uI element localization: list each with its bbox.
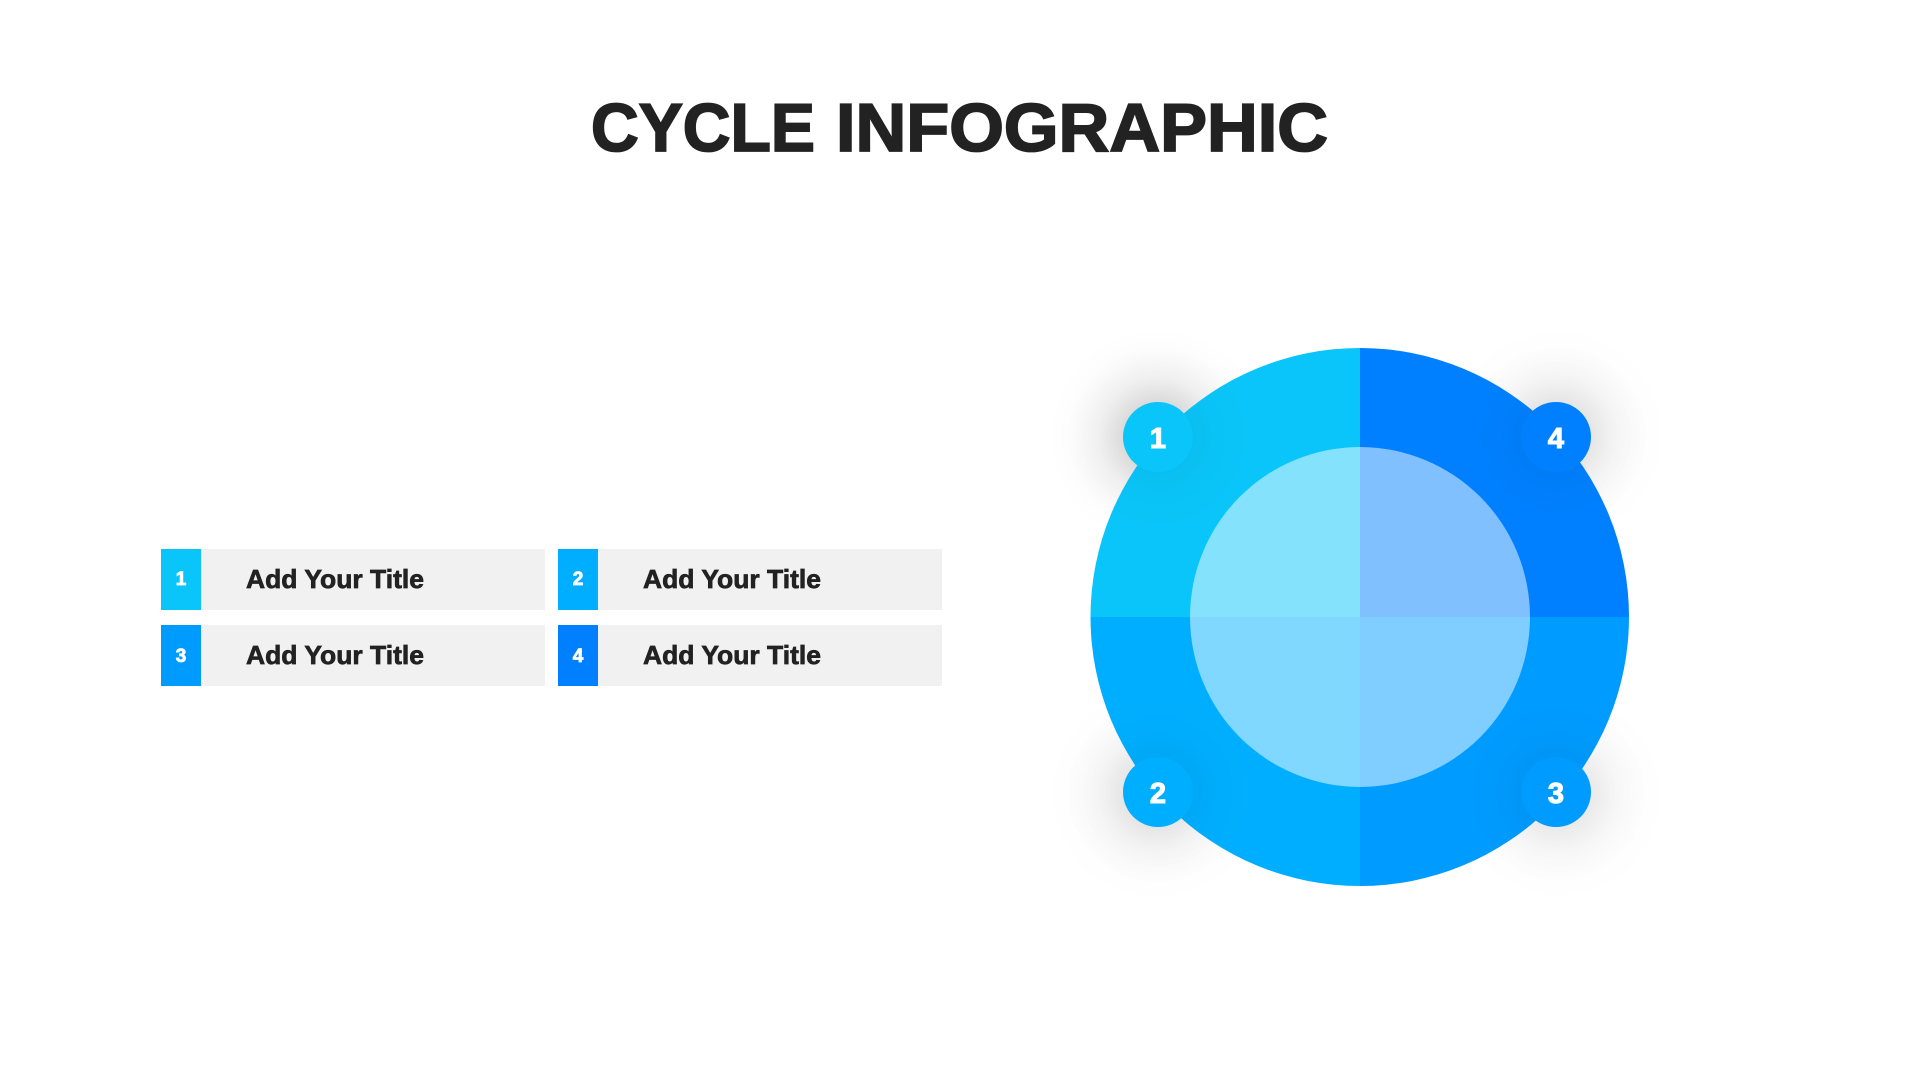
legend item 4: 4 bbox=[573, 646, 584, 667]
title: INFOGRAPHIC bbox=[836, 90, 1328, 166]
legend item 3: Add Your Title bbox=[246, 640, 424, 670]
badge 1: 1 bbox=[1150, 423, 1166, 455]
ring segment 4 bbox=[1360, 348, 1629, 617]
badge 1 bbox=[1123, 402, 1193, 472]
inner circle bbox=[1190, 447, 1530, 787]
ring segment 1 bbox=[1090, 348, 1360, 617]
legend bbox=[161, 549, 942, 686]
ring segment 3 bbox=[1360, 617, 1629, 886]
legend item 2 bbox=[558, 549, 942, 610]
legend item 3 bbox=[161, 625, 545, 686]
badge shadows on ring bbox=[1058, 337, 1656, 892]
legend item 2: 2 bbox=[573, 569, 583, 590]
title: CYCLE bbox=[591, 90, 815, 166]
badge 2: 2 bbox=[1150, 778, 1166, 810]
badge 2 bbox=[1123, 757, 1193, 827]
legend item 4: Add Your Title bbox=[643, 640, 821, 670]
badge 4 bbox=[1521, 402, 1591, 472]
legend item 1 bbox=[161, 549, 545, 610]
badge 3: 3 bbox=[1548, 778, 1564, 810]
cycle diagram bbox=[1046, 325, 1669, 905]
legend item 1: Add Your Title bbox=[246, 564, 424, 594]
badge 3 bbox=[1521, 757, 1591, 827]
legend item 3: 3 bbox=[176, 646, 186, 667]
badge shadows outside ring bbox=[1046, 325, 1669, 905]
legend item 1: 1 bbox=[176, 569, 187, 590]
legend item 4 bbox=[558, 625, 942, 686]
badge 4: 4 bbox=[1548, 423, 1564, 455]
ring segment 2 bbox=[1090, 617, 1360, 886]
title bbox=[591, 90, 1328, 166]
legend item 2: Add Your Title bbox=[643, 564, 821, 594]
